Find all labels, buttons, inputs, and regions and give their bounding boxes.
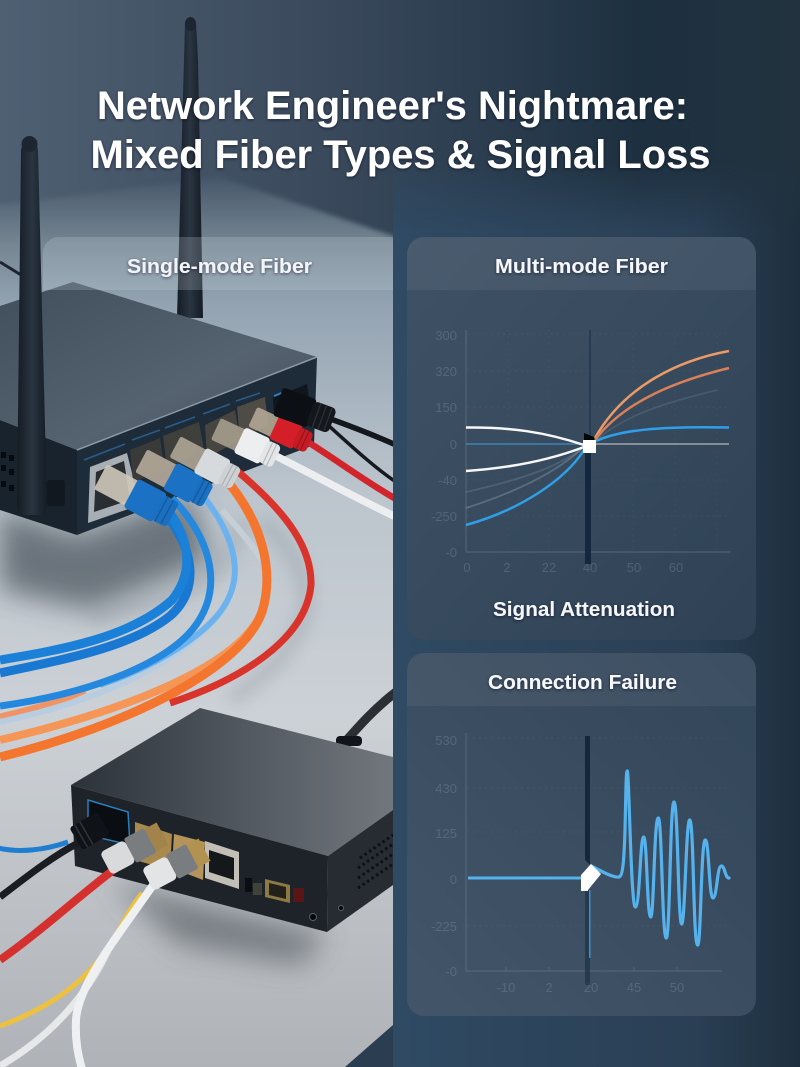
title: Mixed Fiber Types & Signal Loss (90, 133, 710, 177)
heading: multi-mode fiber: Multi-mode Fiber (495, 256, 668, 278)
ghost attenuated traces (466, 390, 729, 508)
panel background (407, 653, 756, 1016)
cable bundle: cables into lower switch (0, 842, 153, 1067)
orange signal curves (595, 351, 729, 440)
x axis labels (463, 560, 683, 575)
x axis labels: 22 (542, 560, 556, 575)
blue signal curves (466, 427, 729, 525)
router left face with vents (0, 420, 77, 535)
x axis labels: 50 (627, 560, 641, 575)
x axis labels: 2 (545, 980, 553, 995)
cable bundle: white and black cables to right edge (268, 418, 396, 517)
heading: single-mode fiber: Single-mode Fiber (127, 256, 312, 278)
switch right face with vents (327, 810, 393, 932)
heading: connection failure: Connection Failure (488, 672, 677, 694)
ports row (84, 384, 312, 523)
chart grid and axes (466, 733, 728, 971)
x axis labels: 60 (669, 560, 683, 575)
disrupted waveform (591, 771, 729, 945)
y axis labels: 320 (435, 364, 457, 379)
y axis labels (431, 328, 457, 560)
panel: multi-mode fiber and signal attenuation (407, 237, 756, 640)
router front face (77, 357, 317, 535)
connector: blue plug one (93, 462, 180, 529)
switch top face (71, 708, 393, 856)
connectors on upper router (93, 387, 338, 529)
panel header band (407, 237, 756, 290)
x axis labels: 0 (463, 560, 471, 575)
y axis labels: 150 (435, 400, 457, 415)
panel background (407, 237, 756, 640)
connector: silver plug two (141, 837, 211, 892)
x axis labels: -10 (497, 980, 515, 995)
connector: silver plug one (99, 821, 169, 876)
icon: front antenna (17, 136, 65, 515)
connector: black plug (273, 387, 338, 435)
x axis labels: 20 (584, 980, 598, 995)
white signal curves (466, 427, 584, 471)
panel header band (407, 653, 756, 706)
y axis labels: 125 (435, 826, 457, 841)
connector: red plug (247, 405, 315, 455)
rear cable on table (0, 262, 26, 278)
connector: blue plug two (134, 447, 215, 510)
chart: connection failure waveform (431, 733, 729, 995)
y axis labels: 0 (450, 437, 457, 452)
connector: white plug one (168, 434, 243, 492)
switch front face (71, 785, 328, 932)
fiber break divider (585, 736, 590, 985)
y axis labels: -250 (431, 509, 457, 524)
y axis labels: 430 (435, 781, 457, 796)
background: table surface (0, 177, 405, 1067)
switch ports and indicators (88, 800, 344, 920)
router top face (0, 282, 317, 450)
connector: white plug two (210, 416, 283, 470)
panel: connection failure (407, 653, 756, 1016)
y axis labels: -40 (438, 473, 457, 488)
y axis labels: 0 (450, 872, 457, 887)
x axis labels (497, 980, 684, 995)
panel header band (43, 237, 393, 290)
heading: signal attenuation: Signal Attenuation (493, 599, 675, 621)
x axis labels: 45 (627, 980, 641, 995)
cable bundle: blue, orange and red cables (0, 470, 311, 757)
soft shadows on the table (0, 495, 327, 965)
right column dark backdrop (345, 186, 756, 1067)
title: Network Engineer's Nightmare: (97, 84, 688, 128)
panel: single-mode fiber (43, 237, 393, 290)
y axis labels: -0 (445, 964, 457, 979)
fiber junction divider (585, 330, 591, 564)
chart grid and axes (466, 330, 730, 552)
power cord behind lower switch (336, 692, 396, 746)
x axis labels: 50 (670, 980, 684, 995)
flat signal trace (468, 876, 584, 880)
y axis labels: -0 (445, 545, 457, 560)
title (90, 84, 710, 177)
x axis labels: 2 (503, 560, 511, 575)
connector: black plug (69, 812, 110, 850)
break marker (581, 864, 601, 891)
chart: signal attenuation curves (431, 328, 730, 575)
y axis labels: 300 (435, 328, 457, 343)
router: upper wireless router (0, 282, 317, 535)
break marker (583, 433, 596, 453)
x axis labels: 40 (583, 560, 597, 575)
switch: lower network switch (71, 708, 393, 932)
connectors on lower switch (69, 812, 211, 892)
y axis labels: -225 (431, 919, 457, 934)
icon: rear antenna (177, 17, 203, 318)
y axis labels: 530 (435, 733, 457, 748)
y axis labels (431, 733, 457, 979)
